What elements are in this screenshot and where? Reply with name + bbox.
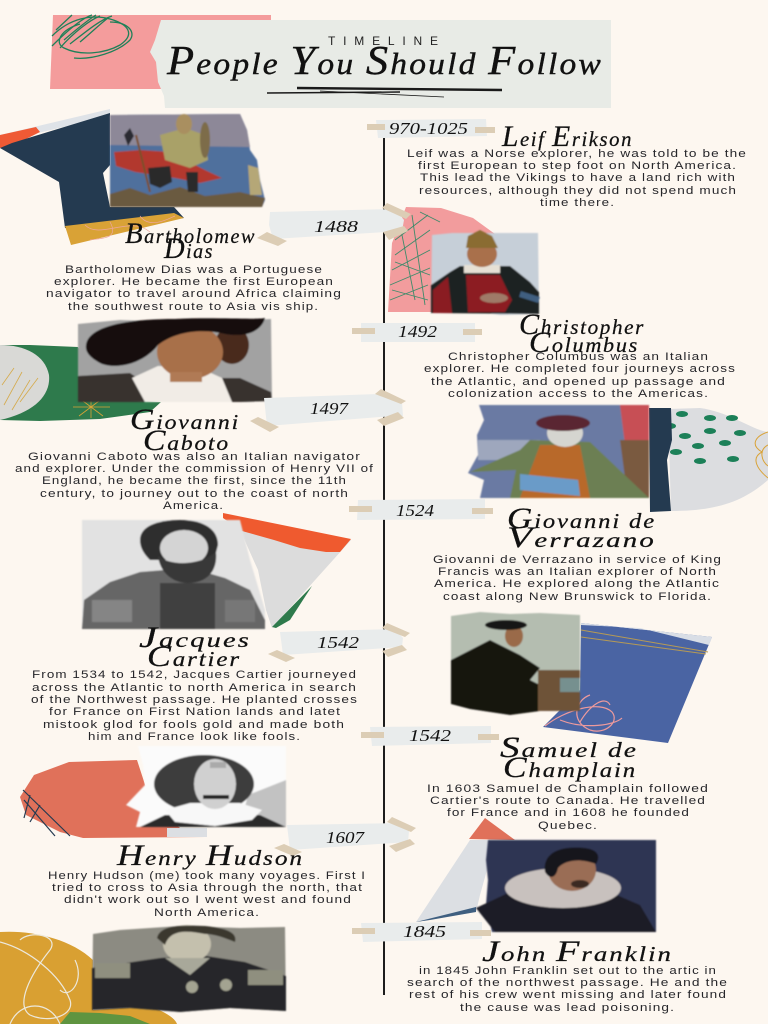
date tab: 1607: 1607: [326, 828, 366, 847]
portrait: man at the rail: [451, 612, 580, 715]
date tab: 1845: [352, 922, 491, 942]
panel: Samuel de Champlain collage: [451, 612, 712, 743]
text: Henry Hudson bio: didn't work out so I went west and found: [64, 894, 352, 906]
portrait: viking on the shore: [110, 114, 265, 207]
text: Bartholomew Dias bio: the southwest route to Asia vis ship.: [68, 301, 319, 313]
date tab: 1524: [349, 499, 493, 520]
portrait: engraved man with moustache: [126, 746, 286, 827]
name: Giovanni de Verrazano: V errazano: [507, 521, 656, 554]
date tab: 1542 (Champlain): [361, 726, 499, 746]
text: Jacques Cartier bio: him and France look like fools.: [88, 731, 301, 743]
light edge strip: [0, 109, 110, 142]
gold blob: [0, 932, 177, 1024]
text: Jacques Cartier bio: [31, 669, 358, 743]
text: Leif Erikson bio: time there.: [540, 197, 615, 209]
text: Giovanni Caboto bio: century, to journey out to the coast of north: [40, 488, 349, 500]
name: Giovanni Caboto: Caboto: [143, 424, 230, 457]
name: John Franklin: John F ranklin: [482, 935, 673, 968]
green scribble: [52, 15, 132, 58]
name: Giovanni de Verrazano: Giovanni de: [507, 502, 656, 535]
date tab: 1497: 1497: [310, 399, 350, 418]
date tab: 1845: 1845: [403, 922, 446, 941]
name: Bartholomew Dias: [125, 217, 256, 265]
text: Samuel de Champlain bio: [427, 783, 709, 832]
panel: Jacques Cartier collage: [82, 513, 351, 629]
text: Leif Erikson bio: Leif was a Norse explorer, he was told to be the: [407, 148, 747, 160]
portrait: man in green coat: [468, 405, 649, 498]
grey blob: [0, 345, 49, 420]
small heading: TIMELINE: [328, 34, 438, 48]
panel: Henry Hudson collage: [20, 746, 286, 838]
name: Christopher Columbus: Christopher: [519, 308, 645, 341]
main title: People You Should Follow: [166, 37, 603, 83]
text: Jacques Cartier bio: for France on First Nation lands and latet: [49, 706, 341, 718]
panel: Bartholomew Dias collage: [388, 207, 539, 315]
name: Jacques Cartier: J acques: [139, 621, 251, 654]
text: Jacques Cartier bio: mistook glod for fools gold and made both: [43, 719, 345, 731]
brush underline: [267, 88, 502, 97]
date tab: 1488: 1488: [314, 217, 359, 236]
portrait: engraved bearded man: [82, 520, 265, 629]
grey torn shape: [416, 840, 490, 922]
grey torn triangle: [240, 530, 351, 628]
text: Henry Hudson bio: Henry Hudson (me) took many voyages. First I: [48, 870, 366, 882]
name: Giovanni de Verrazano: [507, 502, 656, 554]
text: Giovanni de Verrazano bio: [433, 554, 722, 603]
text: Leif Erikson bio: resources, although they did not spend much: [419, 185, 737, 197]
green splatter: [60, 1012, 150, 1024]
torn grey paper: [150, 20, 611, 108]
name: Giovanni Caboto: [130, 403, 240, 457]
date tab: 1492: [352, 322, 482, 342]
name: Giovanni Caboto: Giovanni: [130, 403, 240, 436]
name: Bartholomew Dias: Bartholomew: [125, 217, 256, 250]
gold star: [73, 396, 110, 418]
panel: Christopher Columbus collage: [0, 318, 272, 421]
text: Giovanni de Verrazano bio: America. He explored along the Atlantic: [434, 578, 720, 590]
timeline vertical line: [383, 138, 385, 995]
panel: Giovanni de Verrazano collage: [468, 405, 768, 512]
text: Henry Hudson bio: tried to cross to Asia through the north, that: [52, 882, 363, 894]
date tab: 1542 (Cartier): 1542: [317, 633, 360, 652]
gold shape: [65, 213, 184, 245]
date tab: 1542 (Cartier): [268, 623, 410, 662]
name: Christopher Columbus: [519, 308, 645, 359]
orange splash: [0, 127, 40, 148]
date tab: 1607: [274, 817, 416, 856]
date tab: 1524: 1524: [396, 501, 435, 520]
date tab: 1542 (Champlain): 1542: [409, 726, 452, 745]
text: Bartholomew Dias bio: [46, 264, 342, 313]
navy strip: [649, 408, 672, 512]
name: Samuel de Champlain: [500, 731, 638, 784]
text: Giovanni de Verrazano bio: Francis was an Italian explorer of North: [438, 566, 717, 578]
text: Giovanni de Verrazano bio: coast along New Brunswick to Florida.: [443, 591, 712, 603]
name: Leif Erikson: Leif Erikson: [501, 120, 633, 153]
text: Christopher Columbus bio: Christopher Columbus was an Italian: [448, 351, 709, 363]
text: Giovanni Caboto bio: England, he became the first, since the 11th: [42, 475, 347, 487]
text: Giovanni Caboto bio: America.: [163, 500, 224, 512]
text: Henry Hudson bio: North America.: [154, 907, 260, 919]
text: Henry Hudson bio: [48, 870, 366, 919]
portrait: officer in uniform: [92, 925, 286, 1012]
text: John Franklin bio: [407, 965, 728, 1014]
text: Jacques Cartier bio: across the Atlantic to north America in search: [32, 682, 357, 694]
date tab: 1492: 1492: [398, 322, 438, 341]
date tab: 1497: [250, 389, 406, 432]
name: Samuel de Champlain: Champlain: [503, 751, 637, 784]
green sliver: [272, 586, 312, 628]
text: Bartholomew Dias bio: navigator to travel around Africa claiming: [46, 288, 342, 300]
grey dotted blob: [668, 408, 768, 511]
gold scribble: [755, 432, 768, 478]
name: Bartholomew Dias: Dias: [163, 232, 214, 265]
header banner: [50, 15, 611, 108]
orange torn shape: [20, 760, 205, 838]
blue torn paper: [543, 623, 712, 743]
torn pink paper: [50, 15, 271, 89]
name: Samuel de Champlain: Samuel de: [500, 731, 638, 764]
portrait: man in black hat: [78, 318, 272, 402]
name: Henry Hudson: Henry Hudson: [116, 839, 304, 872]
panel: Leif Erikson collage: [0, 109, 265, 245]
name: Christopher Columbus: Columbus: [529, 326, 639, 359]
portrait: man in fur hat: [431, 230, 539, 315]
green torn shape: [0, 345, 161, 421]
name: Jacques Cartier: Cartier: [147, 640, 241, 673]
text: Bartholomew Dias bio: Bartholomew Dias was a Portuguese: [65, 264, 323, 276]
orange torn shape: [223, 513, 351, 552]
text: Christopher Columbus bio: explorer. He completed four journeys across: [424, 363, 736, 375]
text: John Franklin bio: search of the northwest passage. He and the: [407, 977, 728, 989]
text: Giovanni Caboto bio: [15, 451, 374, 512]
panel: John Franklin collage: [416, 818, 656, 932]
date tab: 1488: [257, 203, 411, 246]
text: Christopher Columbus bio: [424, 351, 736, 400]
text: Giovanni Caboto bio: and explorer. Under the commission of Henry VII of: [15, 463, 374, 475]
portrait: man with white ruff: [476, 840, 656, 932]
white scribble: [0, 935, 78, 1024]
torn pink paper with map lines: [388, 207, 495, 312]
name: Jacques Cartier: [139, 621, 251, 673]
panel: officer portrait collage: [0, 925, 286, 1024]
text: Leif Erikson bio: first European to step foot on North America.: [418, 160, 737, 172]
text: Giovanni de Verrazano bio: Giovanni de Verrazano in service of King: [433, 554, 722, 566]
orange torn triangle: [469, 818, 515, 840]
pink scribble: [545, 695, 622, 731]
text: Christopher Columbus bio: colonization access to the Americas.: [448, 388, 709, 400]
text: Giovanni Caboto bio: Giovanni Caboto was also an Italian navigator: [28, 451, 361, 463]
navy torn shape: [0, 113, 184, 228]
text: John Franklin bio: in 1845 John Franklin set out to the artic in: [419, 965, 717, 977]
text: Samuel de Champlain bio: In 1603 Samuel de Champlain followed: [427, 783, 709, 795]
text: Leif Erikson bio: This lead the Vikings to have a land rich with: [420, 172, 736, 184]
text: Leif Erikson bio: [407, 148, 747, 209]
text: Bartholomew Dias bio: explorer. He became the first European: [54, 276, 334, 288]
date tab: 970-1025: [367, 119, 495, 138]
text: John Franklin bio: rest of his crew went missing and later found: [409, 989, 727, 1001]
date tab: 970-1025: 970-1025: [389, 119, 468, 138]
text: Jacques Cartier bio: of the Northwest passage. He planted crosses: [31, 694, 358, 706]
text: Samuel de Champlain bio: for France and in 1608 he founded: [447, 807, 690, 819]
text: Samuel de Champlain bio: Cartier's route to Canada. He travelled: [430, 795, 706, 807]
text: John Franklin bio: the cause was lead poisoning.: [460, 1002, 675, 1014]
green dots: [664, 411, 746, 464]
text: Jacques Cartier bio: From 1534 to 1542, Jacques Cartier journeyed: [32, 669, 357, 681]
text: Christopher Columbus bio: the Atlantic, and opened up passage and: [431, 376, 726, 388]
text: Samuel de Champlain bio: Quebec.: [538, 820, 598, 832]
